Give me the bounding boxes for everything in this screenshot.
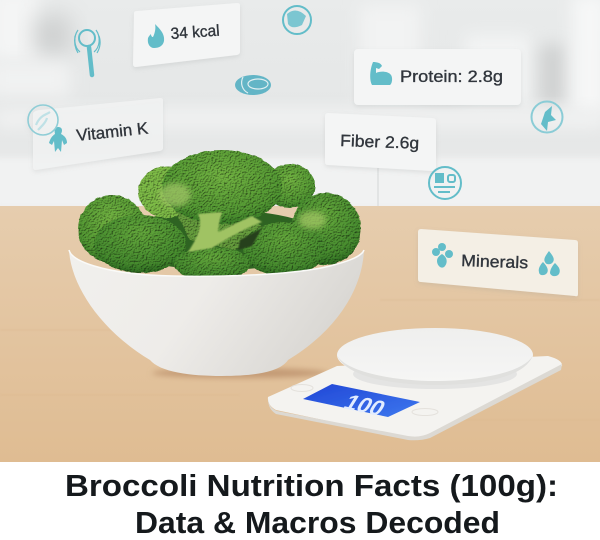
bowl shadow xyxy=(152,368,328,378)
digital display reading 100: 100 xyxy=(339,390,391,420)
card: Fiber xyxy=(325,113,436,171)
wooden table top xyxy=(0,206,600,463)
title: Data & Macros Decoded xyxy=(135,505,500,540)
card: 34 kcal xyxy=(133,3,240,67)
digital display reading 100 xyxy=(303,384,420,420)
white bowl xyxy=(69,250,364,376)
card: 34 kcal: 34 kcal xyxy=(170,23,220,43)
card: Minerals xyxy=(418,229,578,296)
title: Broccoli Nutrition Facts (100g): xyxy=(65,468,558,503)
icon: vitamin circle xyxy=(28,105,58,135)
broccoli xyxy=(78,150,361,281)
blurred kitchen background xyxy=(0,0,600,215)
kitchen scale xyxy=(268,328,562,440)
card: Vitamin K: Vitamin K xyxy=(76,120,149,145)
title band xyxy=(0,462,600,540)
icon: flame xyxy=(148,24,164,48)
card: Protein xyxy=(354,49,521,105)
icon: cell cluster circle xyxy=(532,102,562,132)
icon: nutrition label circle xyxy=(429,167,461,199)
icon: mineral cluster xyxy=(432,243,453,268)
icon: nutrition capsule xyxy=(235,75,271,95)
card: Minerals: Minerals xyxy=(461,252,528,272)
icon: flexed arm xyxy=(370,62,392,85)
title xyxy=(65,468,558,540)
icon: mineral droplets xyxy=(539,251,560,276)
card: Vitamin K xyxy=(28,98,163,170)
card: Fiber: Fiber 2.6g xyxy=(340,132,419,153)
card: Protein: Protein: 2.8g xyxy=(400,68,503,86)
icon: rotating cycle circle xyxy=(283,6,311,34)
icon: joint figure xyxy=(49,127,67,152)
icon: magnifier with waves xyxy=(75,30,100,75)
